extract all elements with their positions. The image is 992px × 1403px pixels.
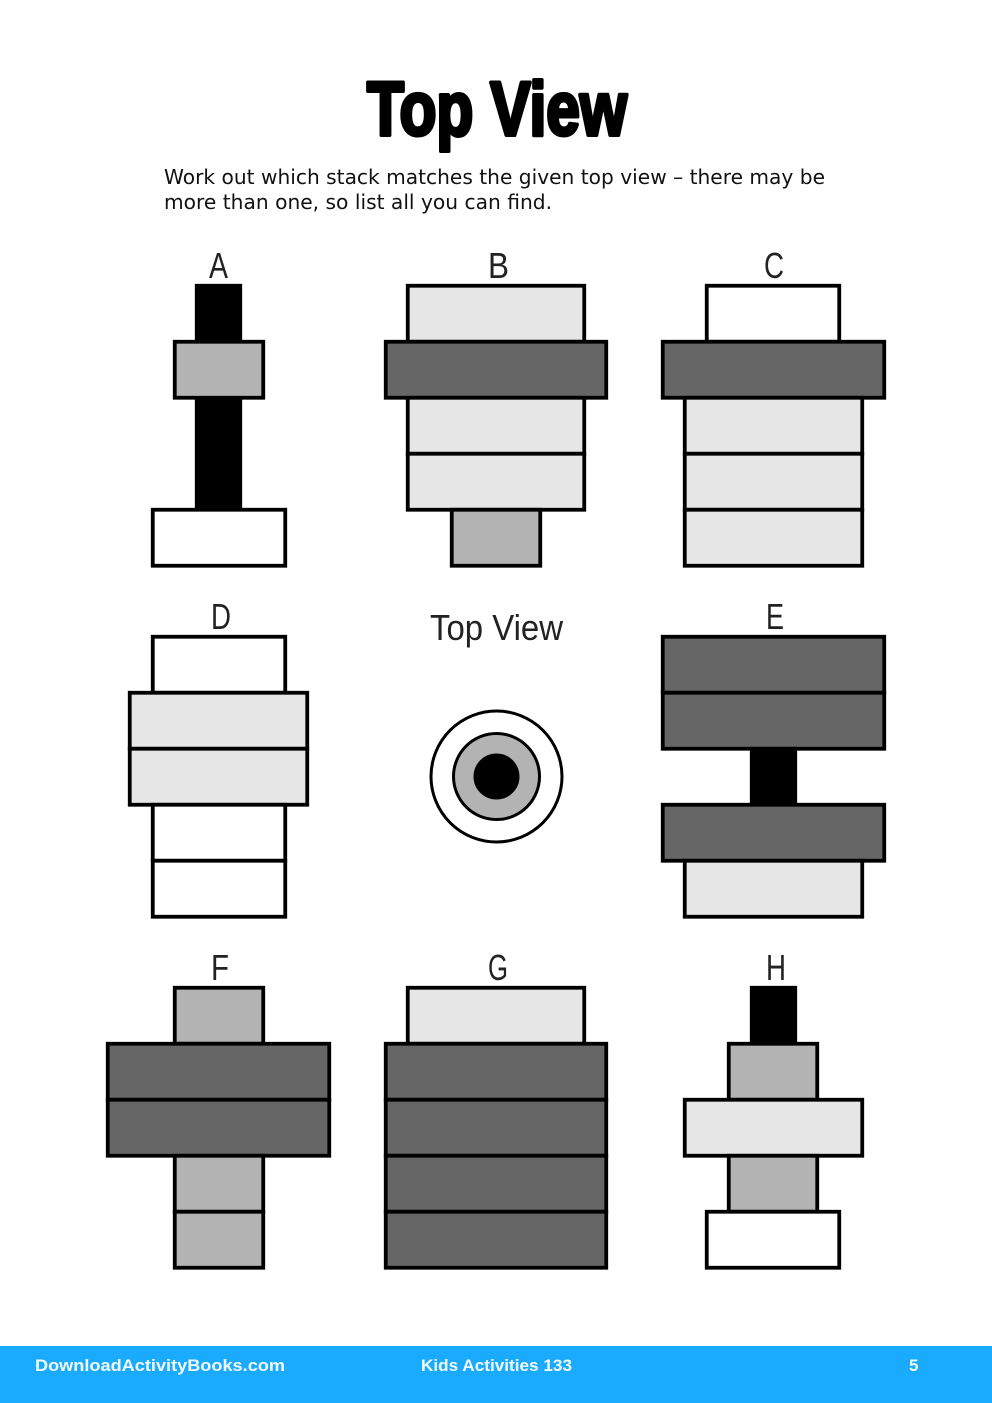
instructions text: Work out which stack matches the given top view – there may be [164,165,825,189]
instructions text [164,165,825,214]
stack D: D [211,596,231,637]
stack E [663,596,884,917]
stack F [108,947,329,1268]
stack F: F [211,947,229,988]
footer bar: DownloadActivityBooks.com [35,1356,285,1375]
stack D [130,596,307,917]
stack H [685,947,862,1268]
stack E: E [766,596,784,637]
footer bar: Kids Activities 133 [421,1356,572,1375]
title: Top View [367,67,628,152]
stack B: B [488,245,509,286]
stack A [153,245,285,566]
stack C [663,245,884,566]
stack G: G [488,947,508,988]
top view label: Top View [430,607,564,648]
instructions text: more than one, so list all you can find. [164,190,552,214]
stack C: C [764,245,784,286]
stack B [386,245,606,566]
top view rings [431,711,562,842]
stack G [386,947,606,1268]
stack A: A [209,245,228,286]
stack H: H [766,947,786,988]
footer bar [0,1346,992,1403]
footer bar: 5 [909,1356,918,1375]
